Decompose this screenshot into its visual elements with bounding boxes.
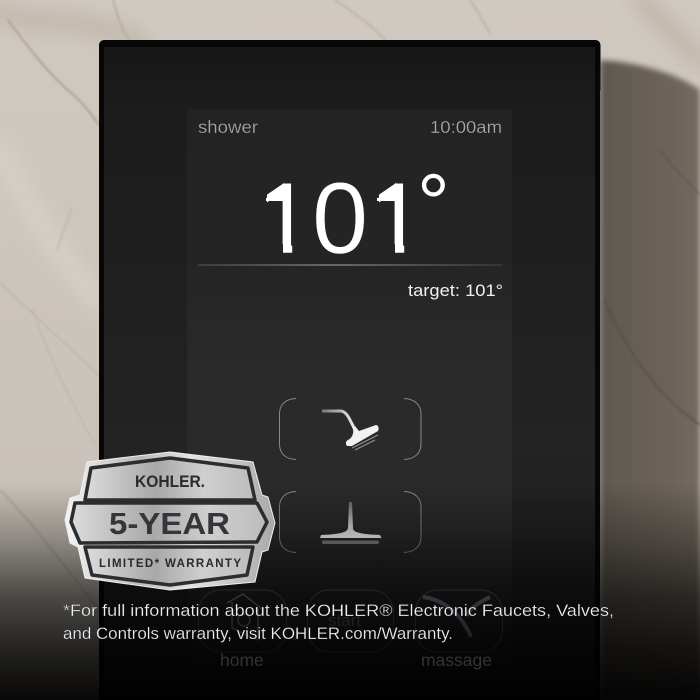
warranty disclaimer text xyxy=(63,601,614,643)
control panel device xyxy=(99,40,602,700)
badge bottom panel xyxy=(85,547,253,585)
device cast shadow xyxy=(600,60,700,700)
button: home xyxy=(198,590,286,652)
icon: rain shower head xyxy=(320,502,382,544)
button: massage xyxy=(416,590,502,652)
button: overhead shower xyxy=(280,398,421,460)
clock: 10:00am: 10:00am xyxy=(430,117,502,137)
label: massage: massage xyxy=(421,650,492,670)
temperature reading: 101 degrees: ° xyxy=(417,158,450,249)
label: home: home xyxy=(220,650,264,670)
icon: angled shower head xyxy=(322,411,379,450)
divider rule xyxy=(198,264,502,266)
label: shower: shower xyxy=(198,117,258,137)
touch screen xyxy=(187,109,512,700)
faint bottom row controls xyxy=(198,590,502,652)
badge heading: 5-YEAR: 5-YEAR xyxy=(109,506,230,541)
button: start xyxy=(308,590,394,652)
label: start: start xyxy=(328,611,361,630)
brand: KOHLER: KOHLER. xyxy=(135,472,205,491)
badge middle band xyxy=(71,503,267,543)
icon: house xyxy=(227,594,262,640)
disclaimer line 2: and Controls warranty, visit KOHLER.com/Warranty. xyxy=(63,624,453,643)
icon: massage jets xyxy=(423,597,490,637)
button: rain shower xyxy=(280,492,421,552)
faded labels xyxy=(220,650,492,670)
bottom dark fade xyxy=(0,483,700,700)
target temperature: target: 101° xyxy=(408,281,503,300)
temperature reading: 101 degrees: 101 xyxy=(257,163,425,275)
disclaimer line 1: *For full information about the KOHLER® Electronic Faucets, Valves, xyxy=(63,601,614,620)
warranty badge xyxy=(65,452,275,590)
badge caption: limited warranty: LIMITED* WARRANTY xyxy=(99,558,241,570)
badge top panel xyxy=(85,458,255,500)
